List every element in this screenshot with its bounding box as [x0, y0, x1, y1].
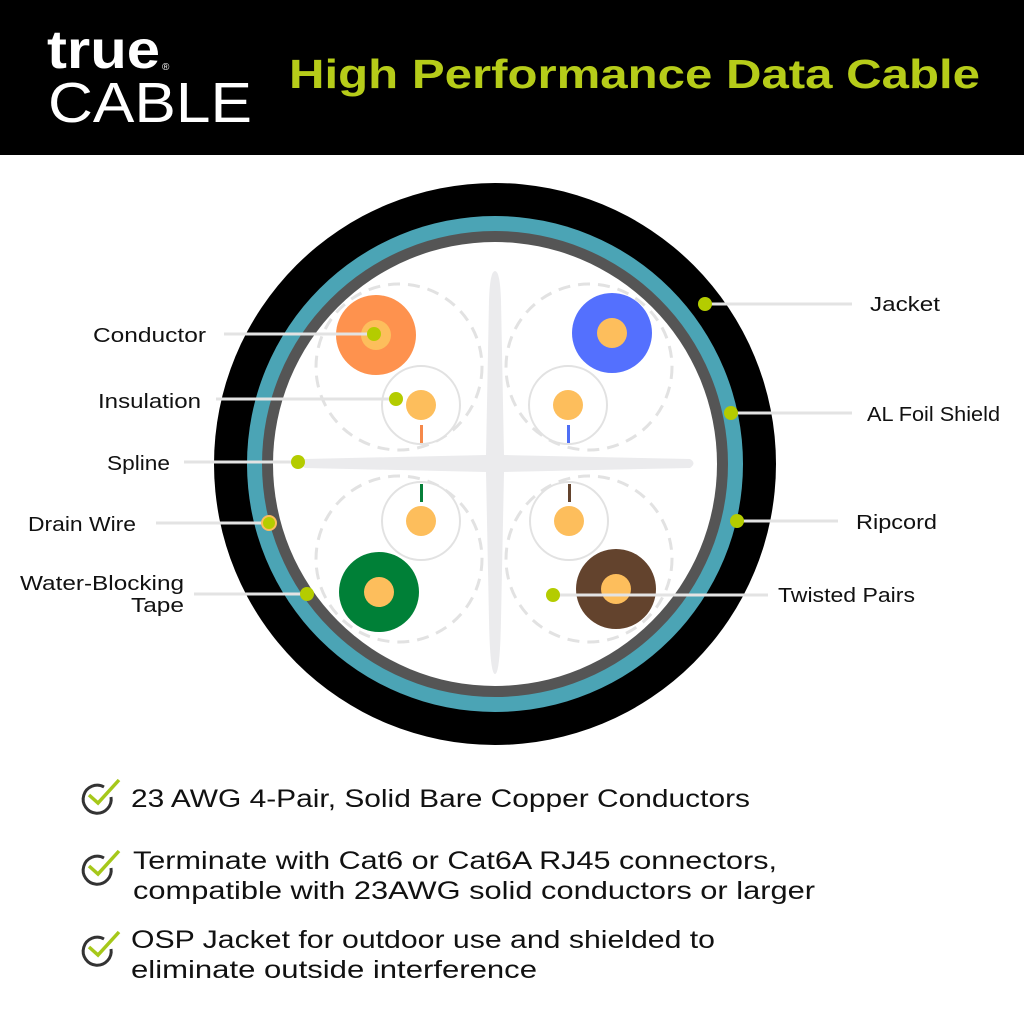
- cable cross-section: [214, 183, 776, 745]
- item 1: 23 AWG 4-Pair, Solid Bare Copper Conductors: [131, 785, 750, 813]
- item 2: [83, 847, 815, 905]
- labels: Drain Wire: [28, 514, 136, 536]
- feature list: [83, 780, 815, 984]
- logo: [47, 20, 252, 135]
- item 3: eliminate outside interference: [131, 956, 537, 984]
- labels: Water-Blocking: [20, 573, 184, 595]
- spline: [302, 271, 694, 674]
- labels: Insulation: [98, 391, 201, 413]
- item 1: [83, 780, 750, 813]
- label dots: [262, 297, 744, 602]
- labels: Conductor: [93, 325, 206, 347]
- item 2: Terminate with Cat6 or Cat6A RJ45 connectors,: [133, 847, 777, 875]
- item 3: OSP Jacket for outdoor use and shielded to: [131, 926, 715, 954]
- labels: Spline: [107, 453, 170, 475]
- item 2: compatible with 23AWG solid conductors or larger: [133, 877, 815, 905]
- labels: Twisted Pairs: [778, 585, 915, 607]
- logo: ®: [162, 62, 170, 73]
- labels: Ripcord: [856, 512, 937, 534]
- title: High Performance Data Cable: [289, 51, 980, 97]
- leader lines: [156, 304, 852, 595]
- labels: AL Foil Shield: [867, 404, 1000, 426]
- labels: [20, 294, 1000, 617]
- labels: Jacket: [870, 294, 941, 316]
- logo: true: [47, 20, 160, 80]
- labels: Tape: [131, 595, 184, 617]
- dashed pair outlines: [316, 284, 672, 642]
- item 3: [83, 926, 715, 984]
- small insulated conductors: [382, 366, 608, 560]
- colored pair conductors: [336, 295, 416, 375]
- logo: CABLE: [48, 71, 252, 135]
- header bar: [0, 0, 1024, 155]
